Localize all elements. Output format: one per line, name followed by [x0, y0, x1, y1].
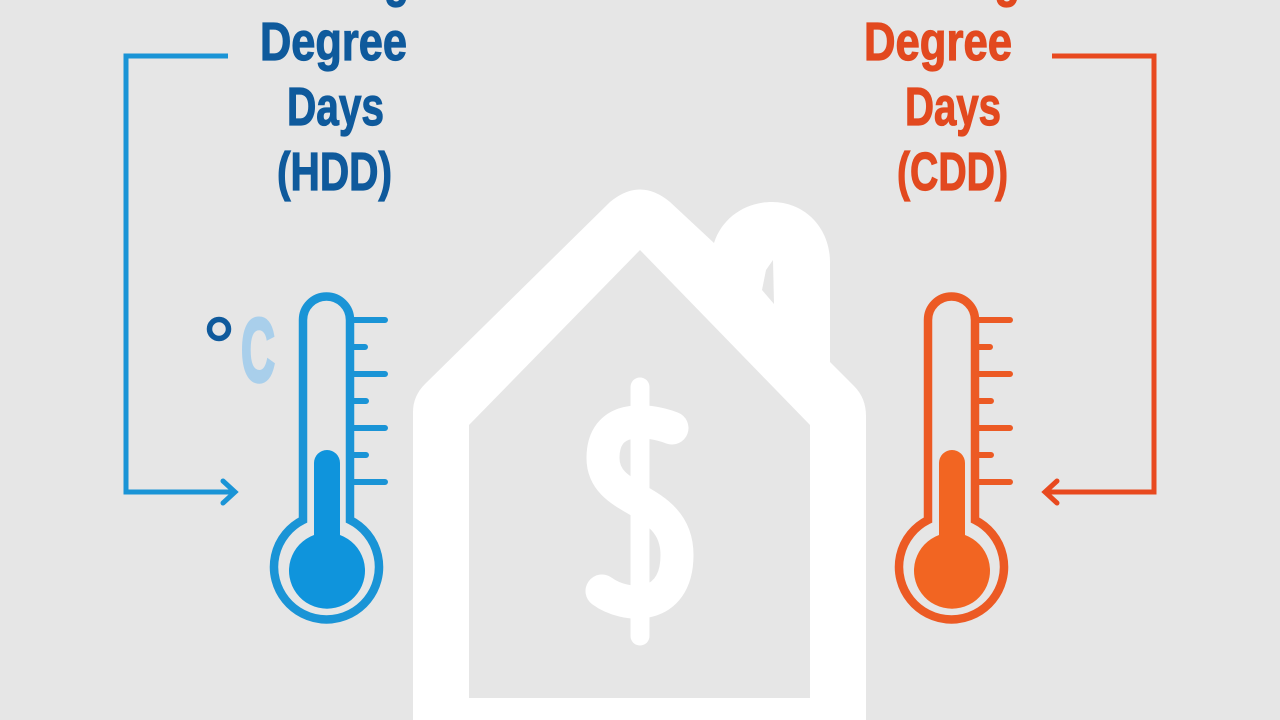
heading: Cooling Degree Days (CDD): Degree — [864, 12, 1012, 72]
arrow: heating bracket — [126, 56, 235, 503]
heading: Heating Degree Days (HDD): Degree — [260, 12, 407, 72]
heading: Heating Degree Days (HDD): (HDD) — [277, 142, 392, 202]
icon: degree Celsius symbol: C — [241, 301, 275, 401]
icon: orange thermometer — [899, 296, 1010, 619]
icon: blue thermometer — [274, 296, 385, 619]
mercury — [289, 450, 365, 609]
scale ticks — [977, 320, 1010, 482]
heading: Heating Degree Days (HDD): Days — [287, 77, 384, 137]
heading: Cooling Degree Days (CDD): Days — [905, 77, 1001, 137]
heading: Cooling Degree Days (CDD): (CDD) — [897, 142, 1008, 202]
thermometer outline — [899, 296, 1004, 619]
heading: Heating Degree Days (HDD) — [259, 0, 409, 202]
house outline with chimney — [413, 190, 866, 720]
scale ticks — [352, 320, 385, 482]
mercury — [914, 450, 990, 609]
thermometer outline — [274, 296, 379, 619]
dollar sign — [602, 387, 677, 636]
icon: house with dollar sign — [413, 190, 866, 720]
arrow: cooling bracket — [1045, 56, 1154, 503]
heading: Cooling Degree Days (CDD) — [864, 0, 1020, 202]
icon: degree Celsius symbol — [210, 301, 275, 401]
